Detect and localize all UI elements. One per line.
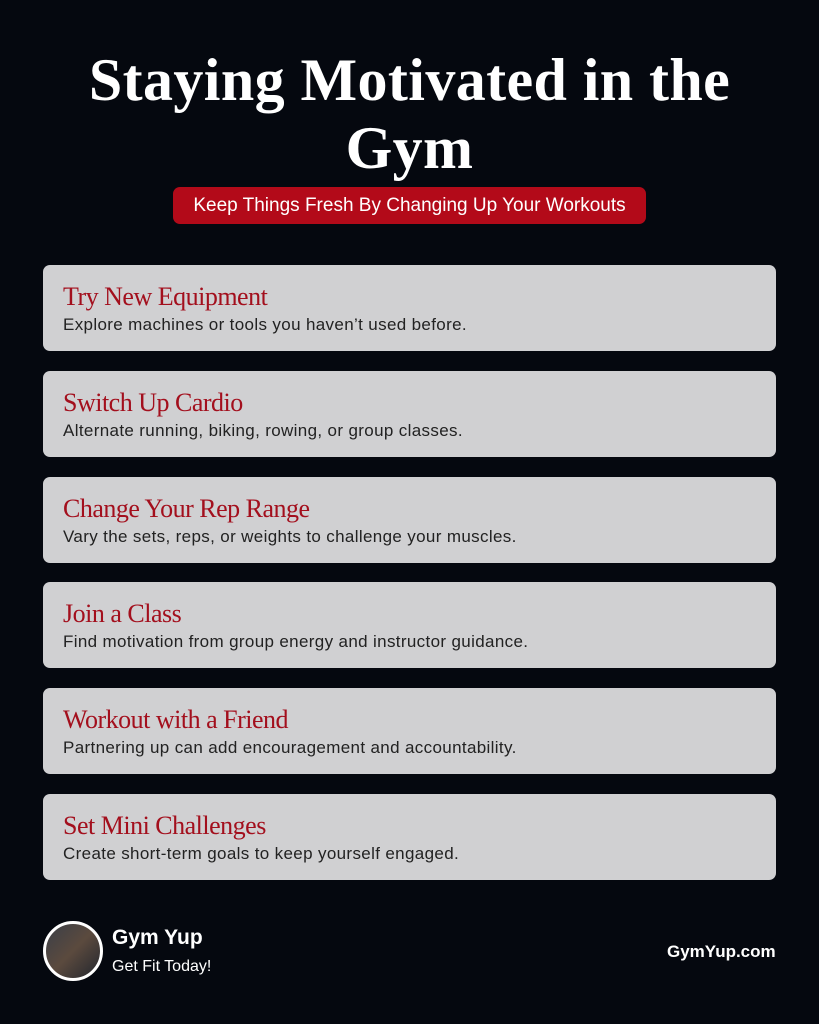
brand name: Gym Yup bbox=[112, 926, 203, 949]
card: join a class: Find motivation from group energy and instructor guidance. bbox=[63, 632, 528, 651]
avatar icon bbox=[43, 921, 103, 981]
card: switch up cardio: Alternate running, biking, rowing, or group classes. bbox=[63, 421, 463, 440]
card: set mini challenges: Set Mini Challenges bbox=[63, 811, 266, 840]
card: join a class bbox=[43, 582, 776, 668]
card: switch up cardio: Switch Up Cardio bbox=[63, 388, 243, 417]
card: join a class: Join a Class bbox=[63, 599, 181, 628]
card: try new equipment: Try New Equipment bbox=[63, 282, 267, 311]
tagline: Get Fit Today! bbox=[112, 958, 211, 975]
card: workout with a friend: Partnering up can add encouragement and accountability. bbox=[63, 738, 517, 757]
title: Staying Motivated in the bbox=[89, 47, 730, 113]
title: Gym bbox=[346, 115, 473, 181]
card: change rep range bbox=[43, 477, 776, 563]
card: workout with a friend: Workout with a Friend bbox=[63, 705, 288, 734]
card: try new equipment bbox=[43, 265, 776, 351]
card: switch up cardio bbox=[43, 371, 776, 457]
website: GymYup.com bbox=[667, 942, 776, 961]
card: workout with a friend bbox=[43, 688, 776, 774]
subtitle pill bbox=[173, 187, 646, 224]
title bbox=[89, 47, 730, 181]
subtitle pill: Keep Things Fresh By Changing Up Your Workouts bbox=[193, 195, 626, 216]
card: set mini challenges bbox=[43, 794, 776, 880]
card: change rep range: Change Your Rep Range bbox=[63, 494, 310, 523]
card: change rep range: Vary the sets, reps, or weights to challenge your muscles. bbox=[63, 527, 517, 546]
card: try new equipment: Explore machines or tools you haven’t used before. bbox=[63, 315, 467, 334]
card: set mini challenges: Create short-term goals to keep yourself engaged. bbox=[63, 844, 459, 863]
